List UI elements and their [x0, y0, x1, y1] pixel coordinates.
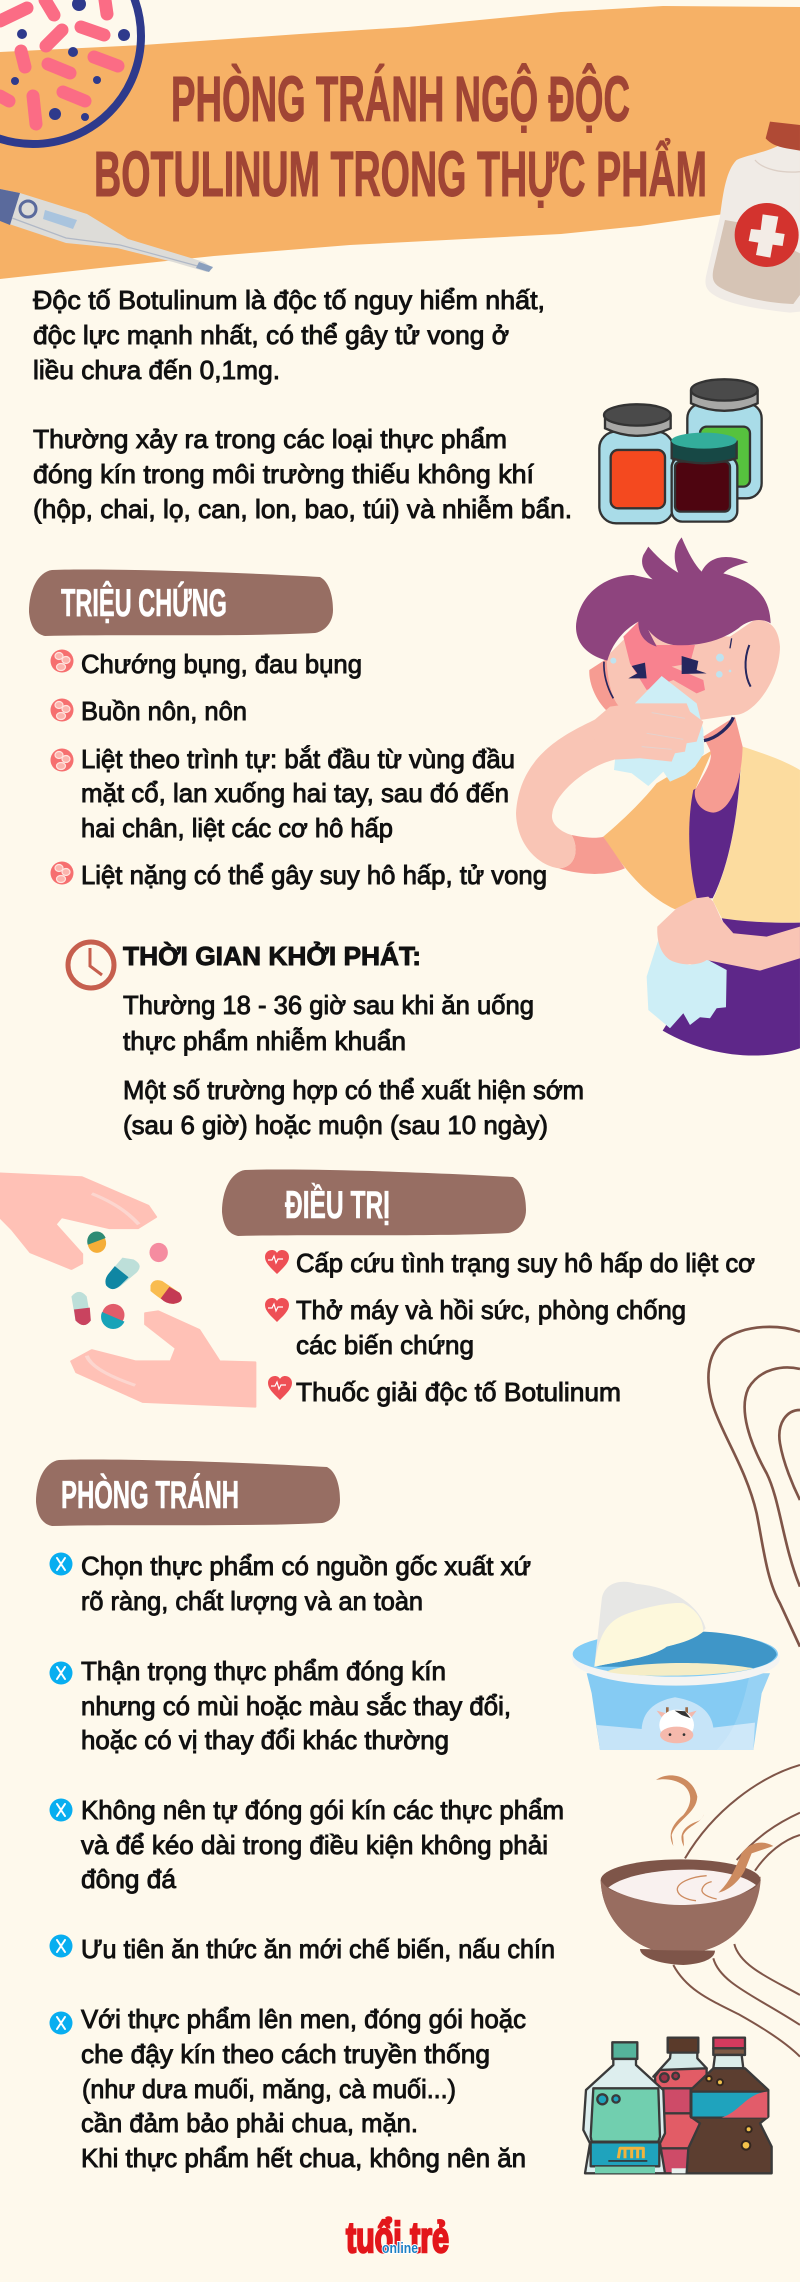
- intro text: liều chưa đến 0,1mg.: [33, 355, 280, 385]
- intro text: Độc tố Botulinum là độc tố nguy hiểm nhất,: [33, 285, 545, 315]
- treatment list: Cấp cứu tình trạng suy hô hấp do liệt cơ: [296, 1248, 755, 1278]
- head: [589, 618, 780, 720]
- prevention list: [50, 1551, 564, 2173]
- symptoms list: mặt cổ, lan xuống hai tay, sau đó đến: [81, 778, 509, 808]
- onset time block: thực phẩm nhiễm khuẩn: [123, 1026, 406, 1056]
- prevention list: cần đảm bảo phải chua, mặn.: [81, 2108, 418, 2138]
- prevention list: Không nên tự đóng gói kín các thực phẩm: [81, 1795, 564, 1825]
- hair: [576, 537, 771, 661]
- onset time block: Thường 18 - 36 giờ sau khi ăn uống: [123, 990, 534, 1020]
- title: [94, 62, 707, 210]
- lower tissue: [647, 940, 727, 1028]
- top hand: [0, 1174, 156, 1269]
- prevention list: che đậy kín theo cách truyền thống: [81, 2039, 490, 2069]
- logo: Tuổi Trẻ Online: online: [382, 2240, 418, 2257]
- prevention list: Ưu tiên ăn thức ăn mới chế biến, nấu chín: [81, 1934, 555, 1964]
- lower hand: [657, 897, 800, 971]
- treatment list: các biến chứng: [296, 1330, 474, 1360]
- neck: [695, 717, 743, 813]
- icon: soft drink bottles: [583, 2038, 772, 2173]
- icon: bowl with spoon and steam: [601, 1775, 773, 1965]
- symptoms list: Liệt nặng có thể gây suy hô hấp, tử vong: [81, 860, 547, 890]
- prevention list: Với thực phẩm lên men, đóng gói hoặc: [81, 2004, 526, 2034]
- icon: jars: [599, 379, 762, 523]
- intro text: độc lực mạnh nhất, có thể gây tử vong ở: [33, 320, 509, 350]
- section heading: symptoms: [29, 570, 333, 636]
- onset time block: Một số trường hợp có thể xuất hiện sớm: [123, 1075, 584, 1105]
- header band: [0, 6, 800, 279]
- treatment list: Thở máy và hồi sức, phòng chống: [296, 1295, 686, 1325]
- prevention list: Khi thực phẩm hết chua, không nên ăn: [81, 2143, 526, 2173]
- prevention list: Chọn thực phẩm có nguồn gốc xuất xứ: [81, 1551, 531, 1581]
- cow face: [657, 1707, 697, 1743]
- arm: [516, 710, 640, 874]
- onset time block: THỜI GIAN KHỞI PHÁT:: [123, 940, 421, 971]
- tissue: [614, 676, 704, 786]
- prevention list: (như dưa muối, măng, cà muối...): [82, 2074, 456, 2104]
- symptoms list: Liệt theo trình tự: bắt đầu từ vùng đầu: [81, 744, 515, 774]
- intro text: (hộp, chai, lọ, can, lon, bao, túi) và nhiễm bẩn.: [33, 494, 572, 524]
- shirt: [663, 763, 800, 1056]
- prevention list: hoặc có vị thay đổi khác thường: [81, 1725, 449, 1755]
- prevention list: đông đá: [81, 1864, 177, 1894]
- icon: medicine bottle: [705, 122, 800, 313]
- section heading: symptoms: TRIỆU CHỨNG: [61, 581, 227, 625]
- logo: Tuổi Trẻ Online: tuổi trẻ: [346, 2214, 449, 2262]
- icon: yogurt cup: [572, 1582, 780, 1750]
- symptoms list: Buồn nôn, nôn: [81, 696, 247, 726]
- icon: thermometer: [0, 189, 213, 272]
- section heading: treatment: [222, 1170, 526, 1236]
- illustration: hands and pills: [0, 1174, 255, 1407]
- green bottle: [583, 2042, 665, 2173]
- symptoms list: hai chân, liệt các cơ hô hấp: [81, 813, 393, 843]
- onset time block: [123, 940, 584, 1140]
- symptoms list: Chướng bụng, đau bụng: [81, 649, 362, 679]
- jacket: [603, 747, 800, 923]
- prevention list: rõ ràng, chất lượng và an toàn: [81, 1586, 423, 1616]
- intro text: Thường xảy ra trong các loại thực phẩm: [33, 424, 507, 454]
- decorative swirl lines: [673, 1327, 800, 2057]
- dark bottle: [687, 2038, 772, 2173]
- red bottle: [653, 2038, 707, 2173]
- treatment list: Thuốc giải độc tố Botulinum: [296, 1377, 621, 1407]
- prevention list: và để kéo dài trong điều kiện không phải: [81, 1830, 548, 1860]
- bottom hand: [71, 1311, 255, 1407]
- hand on tissue: [587, 703, 703, 762]
- pills: [71, 1231, 182, 1329]
- section heading: prevention: [36, 1460, 340, 1526]
- prevention list: Thận trọng thực phẩm đóng kín: [81, 1656, 446, 1686]
- icon: bacteria petri dish: [0, 0, 141, 144]
- icon: clock: [68, 942, 114, 988]
- treatment list: [265, 1248, 755, 1407]
- section heading: treatment: ĐIỀU TRỊ: [285, 1183, 390, 1227]
- intro text: [33, 285, 572, 524]
- symptoms list: [50, 649, 547, 890]
- prevention list: nhưng có mùi hoặc màu sắc thay đổi,: [81, 1691, 511, 1721]
- onset time block: (sau 6 giờ) hoặc muộn (sau 10 ngày): [123, 1110, 548, 1140]
- illustration: sick man with tissue: [516, 537, 800, 1056]
- intro text: đóng kín trong môi trường thiếu không khí: [33, 459, 535, 489]
- section heading: prevention: PHÒNG TRÁNH: [61, 1473, 239, 1517]
